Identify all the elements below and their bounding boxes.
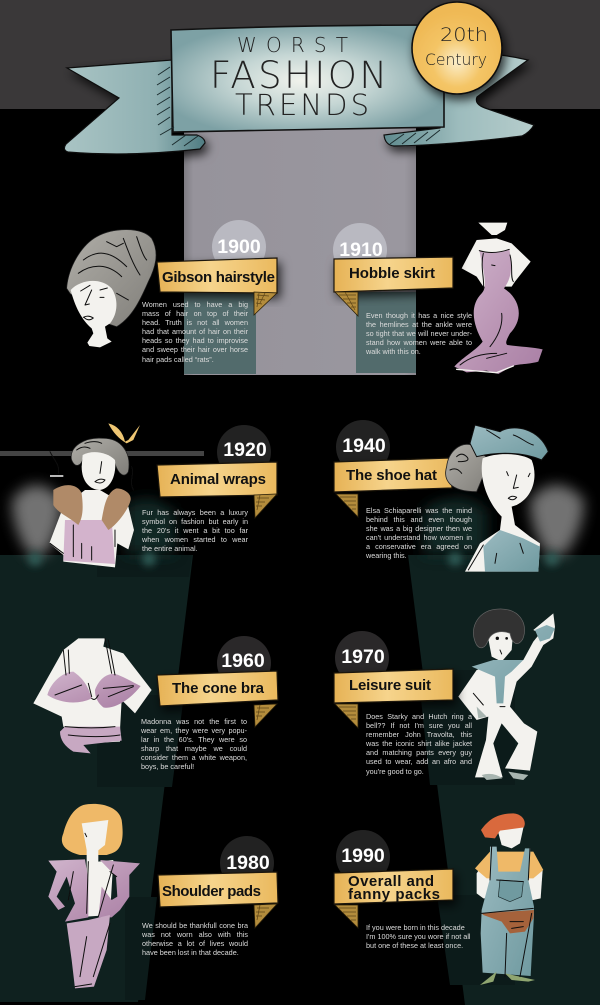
year circle 1940 [336, 420, 390, 474]
entry: 1980 Shoulder pads [48, 804, 278, 988]
description: Even though it has a nice style [366, 311, 472, 320]
description [366, 506, 472, 564]
entry: 1990 Overall and fanny packs [334, 813, 543, 985]
ribbon left tail [64, 60, 205, 154]
banner title: Hobble skirt [349, 265, 435, 282]
ribbon hatching [157, 67, 440, 146]
description [142, 508, 248, 558]
entry: 1970 Leisure suit [334, 609, 555, 780]
description: but one of these at least once. [366, 941, 463, 950]
description: and sweep their hair over horse [142, 345, 248, 354]
description: was not worn also with this [142, 930, 248, 939]
banner [334, 458, 452, 492]
banner fold [254, 704, 277, 727]
year circle 1960 [217, 636, 271, 690]
illustration: disco suit [458, 609, 555, 780]
description [142, 300, 248, 366]
description: boys, be careful! [141, 762, 194, 771]
banner fold [254, 292, 277, 315]
year label: 1960 [221, 650, 265, 672]
banner [334, 669, 453, 703]
description: you're good to go. [366, 767, 424, 776]
description: otherwise a lot of lives would [142, 939, 248, 948]
description: behind this and even though [366, 515, 472, 524]
title text: WORST [237, 33, 348, 57]
title ribbon [64, 2, 534, 154]
description: mass of hair on top of their [142, 309, 248, 318]
description: and matching pants every guy [366, 748, 472, 757]
ribbon main panel [171, 25, 444, 132]
illustration: Gibson hair [67, 230, 156, 347]
description: wear em, they were very popu- [141, 726, 247, 735]
description [366, 311, 472, 361]
banner [334, 257, 453, 292]
description: sharp that maybe we could [141, 744, 247, 753]
description: bell?? If not I'm sure you all [366, 721, 472, 730]
description [141, 717, 247, 775]
banner fold [335, 704, 358, 728]
description: Fur has always been a luxury [142, 508, 248, 517]
description: was the iconic shirt alike jacket [366, 739, 472, 748]
year label: 1900 [217, 236, 261, 258]
description: hair pads called “rats”. [142, 355, 214, 364]
badge: 20th century [412, 2, 502, 94]
background: grey rail [0, 451, 204, 456]
description: when women started to wear [142, 535, 248, 544]
year circle 1990 [336, 830, 390, 884]
year circle 1980 [220, 836, 274, 890]
description: the entire animal. [142, 544, 198, 553]
banner fold [254, 494, 277, 518]
banner fold [254, 904, 277, 928]
title text: TRENDS [235, 88, 369, 122]
spotlights [12, 485, 584, 566]
banner [157, 462, 277, 497]
banner title: Animal wraps [170, 471, 266, 488]
banner fold [335, 292, 358, 316]
illustration: purple dress [454, 223, 543, 374]
badge: 20th century: 20th [440, 24, 488, 46]
description: heads so they had to improvise [142, 336, 248, 345]
description: so tight that we will never under- [366, 329, 472, 338]
description: have been lost in that decade. [142, 948, 239, 957]
description: a conservative era agreed on [366, 542, 472, 551]
description: the 20's it went a bit too far [142, 526, 248, 535]
year label: 1910 [339, 239, 383, 261]
banner title: The shoe hat [346, 467, 437, 484]
banner [157, 671, 278, 706]
year circle 1970 [335, 631, 389, 685]
banner title: The cone bra [172, 680, 265, 697]
entry: 1910 Hobble skirt [333, 223, 543, 374]
description: walk with this on. [366, 347, 421, 356]
description: stand how women were able to [366, 338, 472, 347]
description [366, 923, 472, 953]
banner title: Shoulder pads [162, 883, 261, 900]
illustration: overalls and fanny pack [475, 813, 543, 985]
title text: FASHION [210, 54, 387, 97]
year circle 1910 [333, 223, 387, 277]
year label: 1940 [342, 435, 386, 457]
banner title: fanny packs [348, 886, 440, 903]
description: We should be thankfull cone bra [142, 921, 248, 930]
banner title: Leisure suit [349, 677, 431, 694]
description [142, 921, 248, 961]
description: Women used to have a big [142, 300, 248, 309]
description: can't understand how women in [366, 533, 472, 542]
year label: 1990 [341, 845, 385, 867]
background: darker floor blocks [97, 555, 515, 1000]
description: Does Starky and Hutch ring a [366, 712, 472, 721]
year label: 1920 [223, 439, 267, 461]
ribbon right tail [384, 55, 534, 146]
description: Elsa Schiaparelli was the mind [366, 506, 472, 515]
description: she was a big designer then we [366, 524, 472, 533]
description: wearing this. [366, 551, 407, 560]
entry: 1960 The cone bra [33, 636, 278, 775]
entry: 1940 The shoe hat [334, 420, 548, 572]
banner [158, 872, 278, 907]
description: lar in the 60's. They were so [141, 735, 247, 744]
banner [157, 258, 277, 293]
year label: 1970 [341, 646, 385, 668]
description: the hemlines at the ankle were [366, 320, 472, 329]
badge: 20th century: Century [425, 50, 487, 69]
banner title: Gibson hairstyle [162, 269, 275, 286]
year circle 1920 [217, 425, 271, 479]
entry: 1900 Gibson hairstyle [67, 220, 277, 374]
teal text panel [184, 292, 256, 374]
description: remember John Travolta, this [366, 730, 472, 739]
illustration: woman in shoulder pads [48, 804, 140, 988]
description: used to wear, add an afro and [366, 757, 472, 766]
description: had that amount of hair on their [142, 327, 248, 336]
banner title: Overall and [348, 873, 434, 890]
banner fold [336, 494, 358, 517]
teal text panel [356, 292, 416, 373]
year label: 1980 [226, 852, 270, 874]
entry: 1920 Animal wraps [49, 423, 277, 567]
description [366, 712, 472, 778]
illustration: woman in fur [49, 423, 140, 567]
description: If you were born in this decade [366, 923, 465, 932]
title text [210, 33, 387, 122]
description: head. Truth is not all women [142, 318, 248, 327]
description: I'm 100% sure you wore if not all [366, 932, 471, 941]
description: consider them a white weapon, [141, 753, 247, 762]
illustration: woman in shoe hat [446, 425, 548, 572]
banner [334, 869, 453, 904]
description: Madonna was not the first to [141, 717, 247, 726]
year circle 1900 [212, 220, 266, 274]
background: grey runway panel [184, 109, 416, 375]
background: dark wall [0, 0, 600, 109]
description: symbol on fashion but early in [142, 517, 248, 526]
background: teal floor [0, 555, 600, 1005]
illustration: cone bra torso [33, 638, 152, 753]
banner fold [335, 905, 358, 928]
